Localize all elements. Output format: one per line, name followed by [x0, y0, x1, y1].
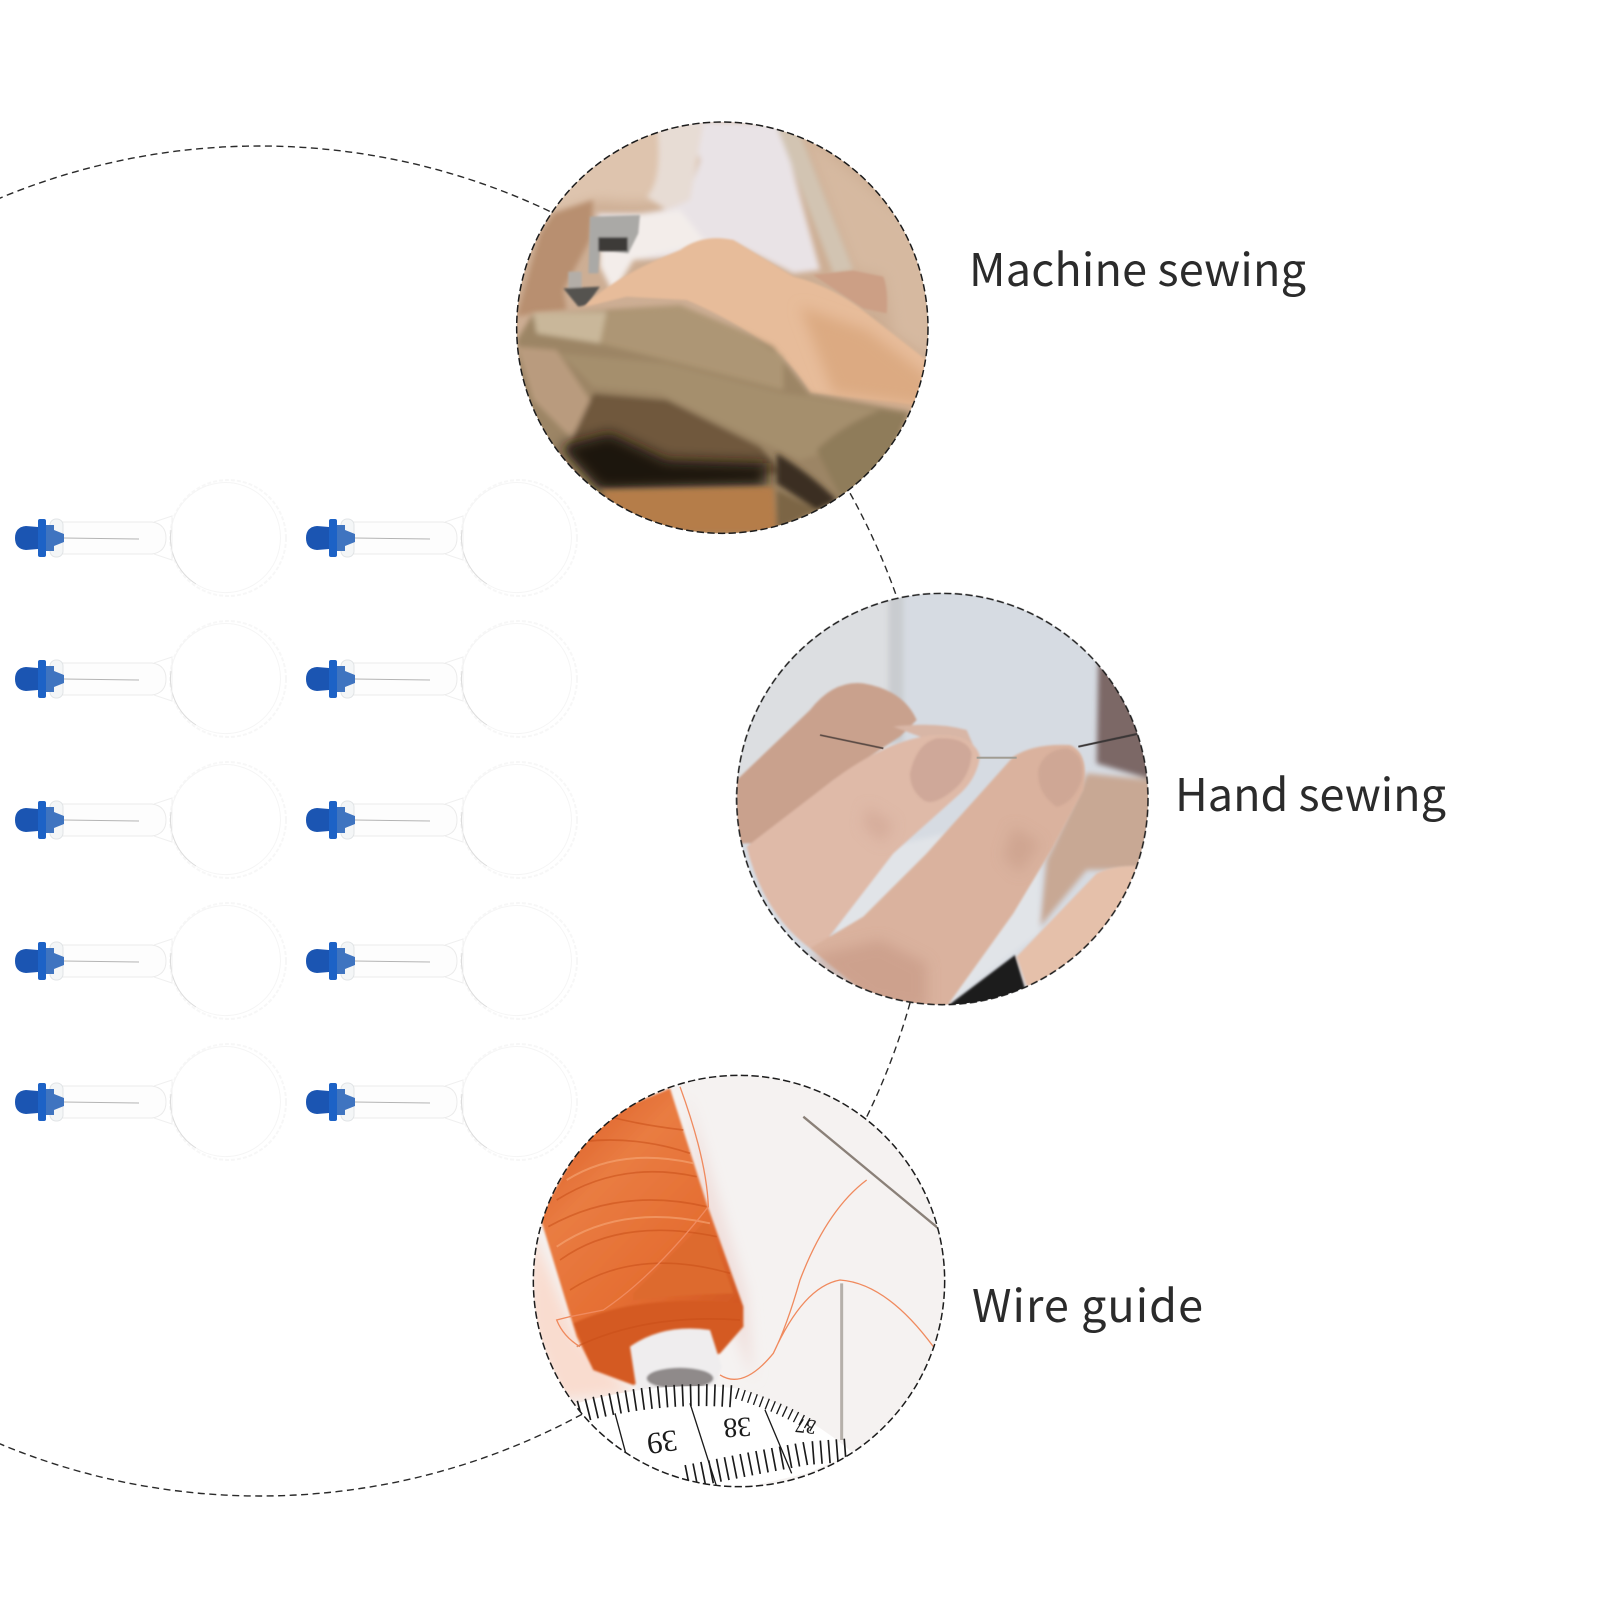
dashed ring: wire guide — [533, 1075, 945, 1487]
photo circle: hand sewing — [736, 592, 1149, 1006]
tape numbers: 38 — [722, 1410, 752, 1443]
spool texture is part of the photo — [548, 1110, 740, 1347]
threader row 3 right — [306, 762, 577, 878]
threader row 5 right — [306, 1044, 577, 1160]
photo circle: wire guide — [532, 1074, 946, 1488]
photo circle: machine sewing — [516, 121, 929, 534]
label: Machine sewing: Machine sewing — [969, 234, 1306, 299]
threader row 3 left — [15, 762, 286, 878]
dashed ring: hand sewing — [737, 593, 1148, 1005]
tape numbers: 37 — [794, 1414, 817, 1438]
label: Hand sewing: Hand sewing — [1175, 759, 1446, 824]
threader row 4 right — [306, 903, 577, 1019]
threader row 1 right — [306, 480, 577, 596]
threader row 4 left — [15, 903, 286, 1019]
threader row 1 left — [15, 480, 286, 596]
threader row 2 right — [306, 621, 577, 737]
dashed connecting circle — [0, 146, 935, 1496]
threader row 2 left — [15, 621, 286, 737]
tape numbers: 39 — [645, 1423, 680, 1461]
dashed ring: machine sewing — [517, 122, 928, 533]
threader row 5 left — [15, 1044, 286, 1160]
label: Wire guide: Wire guide — [972, 1270, 1203, 1335]
needle threaders group — [15, 480, 577, 1160]
tape numbers — [648, 1418, 816, 1454]
